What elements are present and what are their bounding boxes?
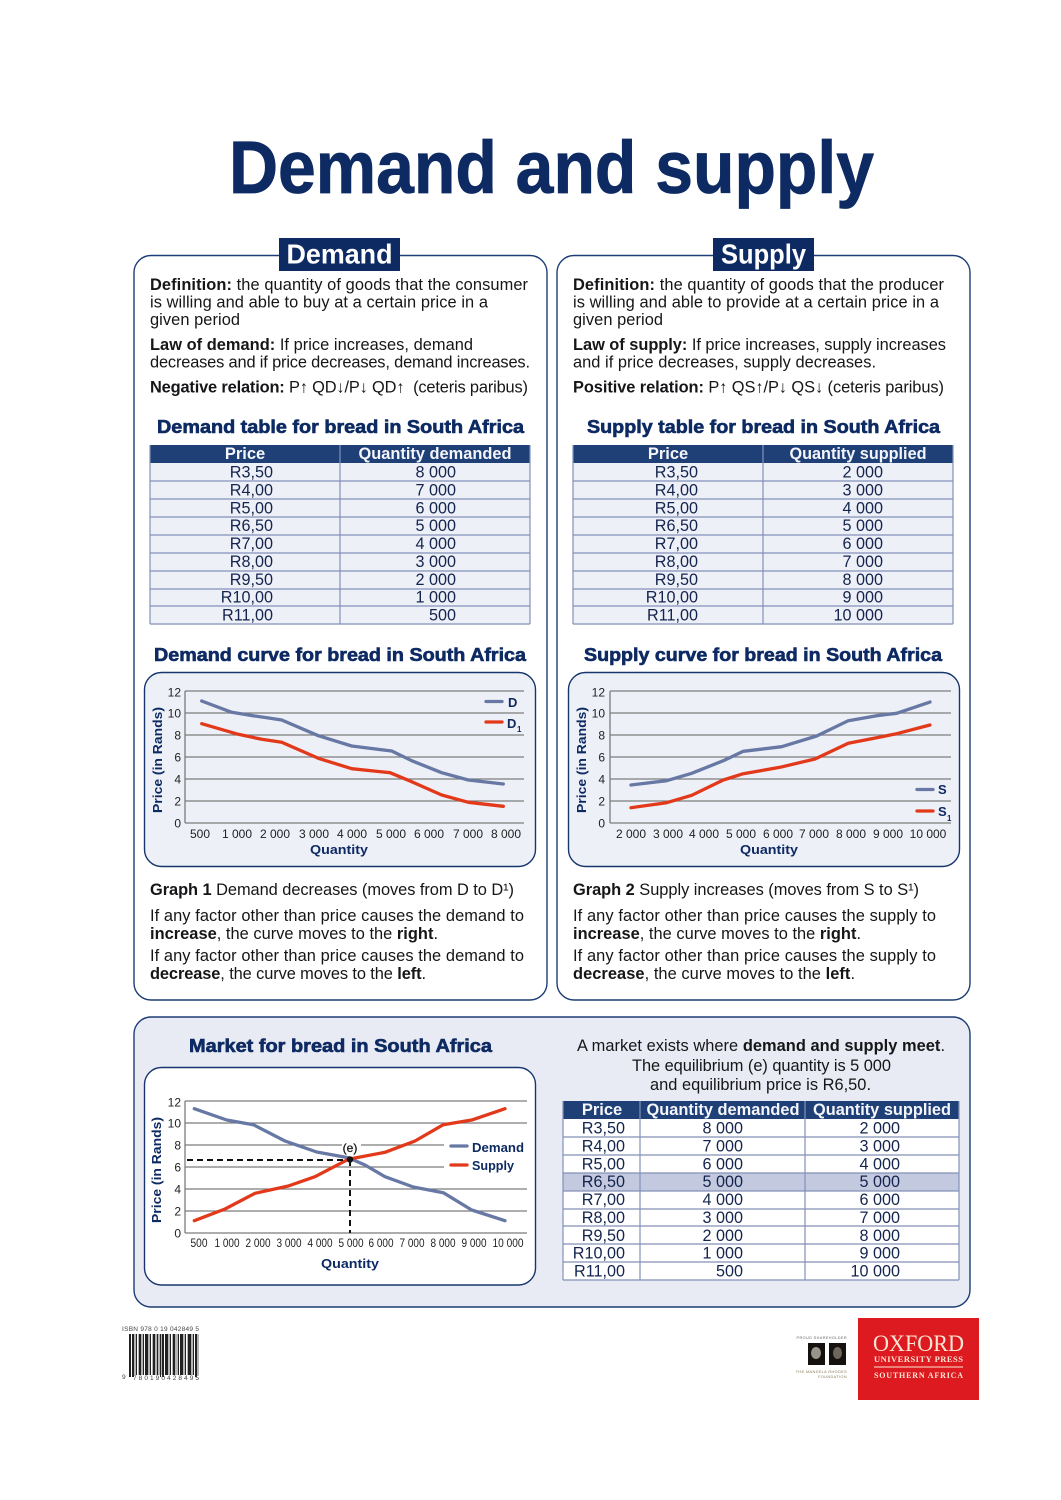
equilibrium point: (e) [343, 1141, 357, 1155]
table: demand: R4,00 [230, 482, 273, 500]
logo: Oxford University Press: OXFORD [873, 1331, 964, 1356]
table: demand: 6 000 [415, 500, 456, 518]
table: demand: R5,00 [230, 500, 273, 518]
table: market: R6,50 [582, 1173, 625, 1191]
table: supply: R4,00 [655, 482, 698, 500]
chart: supply curve: 4 000 [689, 827, 719, 841]
chart: market: 3 000 [276, 1238, 302, 1250]
table: market: 3 000 [702, 1209, 743, 1227]
chart: demand curve: 10 [168, 706, 181, 720]
axis label: quantity: Quantity [321, 1256, 380, 1271]
panel: supply [557, 238, 970, 1000]
table: market: R3,50 [582, 1120, 625, 1138]
table: supply: R9,50 [655, 571, 698, 589]
chart: supply curve: 7 000 [799, 827, 829, 841]
chart: supply curve: 3 000 [653, 827, 683, 841]
chart: market: 1 000 [214, 1238, 240, 1250]
table: supply: R11,00 [647, 606, 698, 624]
text block: supply definition: is willing and able to provide at a certain price in a [573, 294, 940, 312]
chart: demand curve: 12 [168, 686, 181, 700]
table: demand: R11,00 [222, 606, 273, 624]
chart: demand curve: 6 [174, 750, 181, 764]
text block: law of demand [150, 336, 530, 372]
chart: market: 2 [174, 1204, 181, 1218]
text block: supply decrease: If any factor other than price causes the supply to [573, 947, 936, 965]
table: supply: R7,00 [655, 535, 698, 553]
chart: demand curve: 2 000 [260, 827, 290, 841]
equilibrium point [343, 1141, 357, 1163]
chart: demand curve: 4 000 [337, 827, 367, 841]
chart: supply curve: 8 000 [836, 827, 866, 841]
table: demand: 7 000 [415, 482, 456, 500]
barcode: 9 [122, 1374, 126, 1381]
table: market: 4 000 [859, 1156, 900, 1174]
text block: demand decrease [150, 947, 524, 983]
table: supply: Quantity supplied [790, 445, 926, 463]
heading: supply curve: Supply curve for bread in South Africa [584, 645, 943, 665]
chart: demand curve: 500 [190, 827, 210, 841]
text block: demand increase: increase, the curve moves to the right. [150, 925, 438, 943]
heading: demand table: Demand table for bread in South Africa [157, 417, 525, 437]
table: demand: 8 000 [415, 464, 456, 482]
heading: supply: Supply [721, 238, 806, 270]
text block: supply decrease [573, 947, 936, 983]
text block: demand increase: If any factor other than price causes the demand to [150, 907, 524, 925]
table: market: 5 000 [859, 1173, 900, 1191]
chart: demand curve [144, 672, 536, 866]
table: supply: R10,00 [646, 588, 698, 606]
chart: supply curve: 6 000 [763, 827, 793, 841]
chart: market: 7 000 [400, 1238, 424, 1250]
text block: law of supply [573, 336, 946, 372]
text block: market explanation: A market exists where demand and supply meet. [577, 1037, 945, 1055]
barcode: ISBN 978 0 19 042849 5 [122, 1326, 199, 1333]
chart: market [144, 1068, 536, 1285]
chart: market: 4 000 [308, 1238, 332, 1250]
panel: market [134, 1017, 970, 1307]
table: market: R7,00 [582, 1191, 625, 1209]
axis label: price: Price (in Rands) [149, 1117, 164, 1223]
table: market: R8,00 [582, 1209, 625, 1227]
legend: supply curve: 1 [947, 814, 952, 823]
curve: demand [194, 1109, 505, 1221]
table: market: 8 000 [702, 1120, 743, 1138]
chart: market: 10 000 [492, 1238, 524, 1250]
table: demand: R9,50 [230, 571, 273, 589]
legend: demand curve: 1 [517, 725, 522, 734]
legend: market [451, 1140, 524, 1173]
barcode: 780190428495 [133, 1375, 199, 1382]
chart: demand curve: 8 [174, 728, 181, 742]
axis label: quantity: Quantity [740, 842, 799, 857]
curve: S1 [631, 725, 930, 808]
chart: market: 8 000 [430, 1238, 456, 1250]
table: market [563, 1101, 959, 1280]
text block: law of demand: Law of demand: If price increases, demand [150, 336, 473, 354]
table: market: 2 000 [702, 1227, 743, 1245]
chart: market: 12 [168, 1096, 181, 1110]
text block: negative relation: Negative relation: P↑ QD↓/P↓ QD↑ (ceteris paribus) [150, 378, 528, 396]
table: demand: 2 000 [415, 571, 456, 589]
chart: demand curve: 2 [174, 794, 181, 808]
text block: supply increase [573, 907, 936, 943]
chart: supply curve: 9 000 [873, 827, 903, 841]
chart: demand curve: 5 000 [376, 827, 406, 841]
logo: Mandela Rhodes Foundation [796, 1336, 847, 1379]
chart: demand curve: 4 [174, 772, 181, 786]
legend: demand curve: D [508, 695, 517, 710]
chart: market: 500 [190, 1238, 208, 1250]
table: supply: 6 000 [842, 535, 883, 553]
chart: supply curve: 10 000 [910, 827, 947, 841]
table: supply: 9 000 [842, 588, 883, 606]
table: supply: 7 000 [842, 553, 883, 571]
curve: D [202, 701, 503, 784]
chart: demand curve: 7 000 [453, 827, 483, 841]
table: supply: R8,00 [655, 553, 698, 571]
table: demand: 1 000 [415, 588, 456, 606]
text block: supply definition [573, 276, 945, 329]
table: market: Price [582, 1101, 622, 1119]
table: market: 500 [716, 1262, 743, 1280]
text block: law of supply: and if price decreases, supply decreases. [573, 354, 876, 372]
table: demand: Quantity demanded [358, 445, 512, 463]
barcode [122, 1326, 199, 1382]
chart: demand curve: 0 [174, 816, 181, 830]
text block: law of supply: Law of supply: If price increases, supply increases [573, 336, 946, 354]
table: supply: R5,00 [655, 500, 698, 518]
table: market: R4,00 [582, 1138, 625, 1156]
table: supply: 2 000 [842, 464, 883, 482]
chart: supply curve: 5 000 [726, 827, 756, 841]
text block: demand definition: is willing and able to buy at a certain price in a [150, 294, 489, 312]
table: market: 9 000 [859, 1244, 900, 1262]
axis label: price: Price (in Rands) [574, 707, 589, 813]
heading: supply table: Supply table for bread in South Africa [587, 417, 941, 437]
chart: supply curve: 12 [592, 686, 605, 700]
table: demand: R10,00 [221, 588, 273, 606]
logo: Oxford University Press: SOUTHERN AFRICA [874, 1371, 963, 1380]
heading: demand curve: Demand curve for bread in South Africa [154, 645, 527, 665]
curve: S [631, 702, 930, 785]
chart: supply curve: 0 [598, 816, 605, 830]
curve: D1 [202, 724, 503, 806]
text block: supply definition: given period [573, 311, 663, 329]
table: demand: 4 000 [415, 535, 456, 553]
table: demand: 500 [429, 606, 456, 624]
table: market: 5 000 [702, 1173, 743, 1191]
text block: law of demand: decreases and if price decreases, demand increases. [150, 354, 530, 372]
axis label: quantity: Quantity [310, 842, 369, 857]
table: market: 7 000 [859, 1209, 900, 1227]
legend: demand curve [486, 695, 522, 734]
panel: demand [134, 238, 547, 1000]
legend: market: Demand [472, 1140, 524, 1155]
table: market: 6 000 [702, 1156, 743, 1174]
chart: supply curve: 2 000 [616, 827, 646, 841]
table: market: 4 000 [702, 1191, 743, 1209]
text block: market explanation: and equilibrium price is R6,50. [650, 1076, 871, 1094]
legend: supply curve: S [938, 804, 947, 819]
text block: supply definition: Definition: the quantity of goods that the producer [573, 276, 945, 294]
table: market: 6 000 [859, 1191, 900, 1209]
text block: graph 2: Graph 2 Supply increases (moves from S to S¹) [573, 881, 919, 899]
table: supply [573, 445, 953, 624]
heading: market: Market for bread in South Africa [189, 1036, 493, 1056]
table: market: 2 000 [859, 1120, 900, 1138]
chart: demand curve: 3 000 [299, 827, 329, 841]
text block: demand decrease: If any factor other than price causes the demand to [150, 947, 524, 965]
chart: market: 4 [174, 1182, 181, 1196]
legend: market: Supply [472, 1158, 515, 1173]
legend: supply curve [917, 782, 952, 823]
chart: demand curve: 6 000 [414, 827, 444, 841]
chart: supply curve: 4 [598, 772, 605, 786]
chart: market: 2 000 [246, 1238, 270, 1250]
legend: supply curve: S [938, 782, 947, 797]
text block: market explanation: The equilibrium (e) quantity is 5 000 [632, 1057, 891, 1075]
chart: market: 6 [174, 1160, 181, 1174]
chart: market: 0 [174, 1226, 181, 1240]
chart: market: 8 [174, 1138, 181, 1152]
chart: supply curve: 2 [598, 794, 605, 808]
axis label: price: Price (in Rands) [150, 707, 165, 813]
table: demand: Price [225, 445, 265, 463]
title: Demand and supply [229, 126, 874, 209]
table: market: 1 000 [702, 1244, 743, 1262]
chart: supply curve [568, 672, 960, 866]
text block: demand definition [150, 276, 529, 329]
table: supply: 3 000 [842, 482, 883, 500]
table: market: Quantity supplied [813, 1101, 951, 1119]
text block: supply decrease: decrease, the curve moves to the left. [573, 965, 855, 983]
legend: demand curve: D [507, 716, 516, 731]
table: demand [150, 445, 530, 624]
chart: market: 5 000 [338, 1238, 364, 1250]
table: market: 3 000 [859, 1138, 900, 1156]
table: demand: R6,50 [230, 517, 273, 535]
chart: market: 6 000 [368, 1238, 394, 1250]
text block: demand definition: given period [150, 311, 240, 329]
text block: supply increase: If any factor other than price causes the supply to [573, 907, 936, 925]
table: supply: 8 000 [842, 571, 883, 589]
table: demand: R3,50 [230, 464, 273, 482]
logo: Oxford University Press: UNIVERSITY PRESS [874, 1354, 963, 1364]
text block: demand increase [150, 907, 524, 943]
equilibrium guide lines [187, 1160, 350, 1233]
text block: demand decrease: decrease, the curve moves to the left. [150, 965, 426, 983]
table: supply: R3,50 [655, 464, 698, 482]
chart: supply curve: 6 [598, 750, 605, 764]
table: supply: 4 000 [842, 500, 883, 518]
table: supply: 10 000 [833, 606, 883, 624]
table: supply: Price [648, 445, 688, 463]
logo: Oxford University Press [858, 1318, 979, 1400]
curve: supply [194, 1109, 505, 1221]
chart: demand curve: 1 000 [222, 827, 252, 841]
text block: market explanation [577, 1037, 945, 1094]
chart: market: 10 [168, 1116, 181, 1130]
text block: graph 1: Graph 1 Demand decreases (moves from D to D¹) [150, 881, 514, 899]
chart: market: 9 000 [462, 1238, 486, 1250]
table: market: R5,00 [582, 1156, 625, 1174]
logo: Mandela Rhodes Foundation: PROUD SHAREHOLDER [797, 1336, 847, 1340]
table: market: 10 000 [850, 1262, 900, 1280]
table: market: 8 000 [859, 1227, 900, 1245]
table: market: R11,00 [574, 1262, 625, 1280]
table: demand: R7,00 [230, 535, 273, 553]
table: demand: R8,00 [230, 553, 273, 571]
table: market: 7 000 [702, 1138, 743, 1156]
table: supply: 5 000 [842, 517, 883, 535]
table: market: R9,50 [582, 1227, 625, 1245]
text block: positive relation: Positive relation: P↑ QS↑/P↓ QS↓ (ceteris paribus) [573, 378, 944, 396]
chart: demand curve: 8 000 [491, 827, 521, 841]
heading: demand: Demand [286, 238, 392, 270]
chart: supply curve: 10 [592, 706, 605, 720]
table: demand: 3 000 [415, 553, 456, 571]
logo: Mandela Rhodes Foundation: FOUNDATION [818, 1375, 847, 1379]
text block: supply increase: increase, the curve moves to the right. [573, 925, 861, 943]
table: market: R10,00 [573, 1244, 625, 1262]
table: market: Quantity demanded [646, 1101, 800, 1119]
chart: supply curve: 8 [598, 728, 605, 742]
logo: Mandela Rhodes Foundation: THE MANDELA RHODES [796, 1370, 847, 1374]
table: supply: R6,50 [655, 517, 698, 535]
table: demand: 5 000 [415, 517, 456, 535]
text block: demand definition: Definition: the quantity of goods that the consumer [150, 276, 529, 294]
